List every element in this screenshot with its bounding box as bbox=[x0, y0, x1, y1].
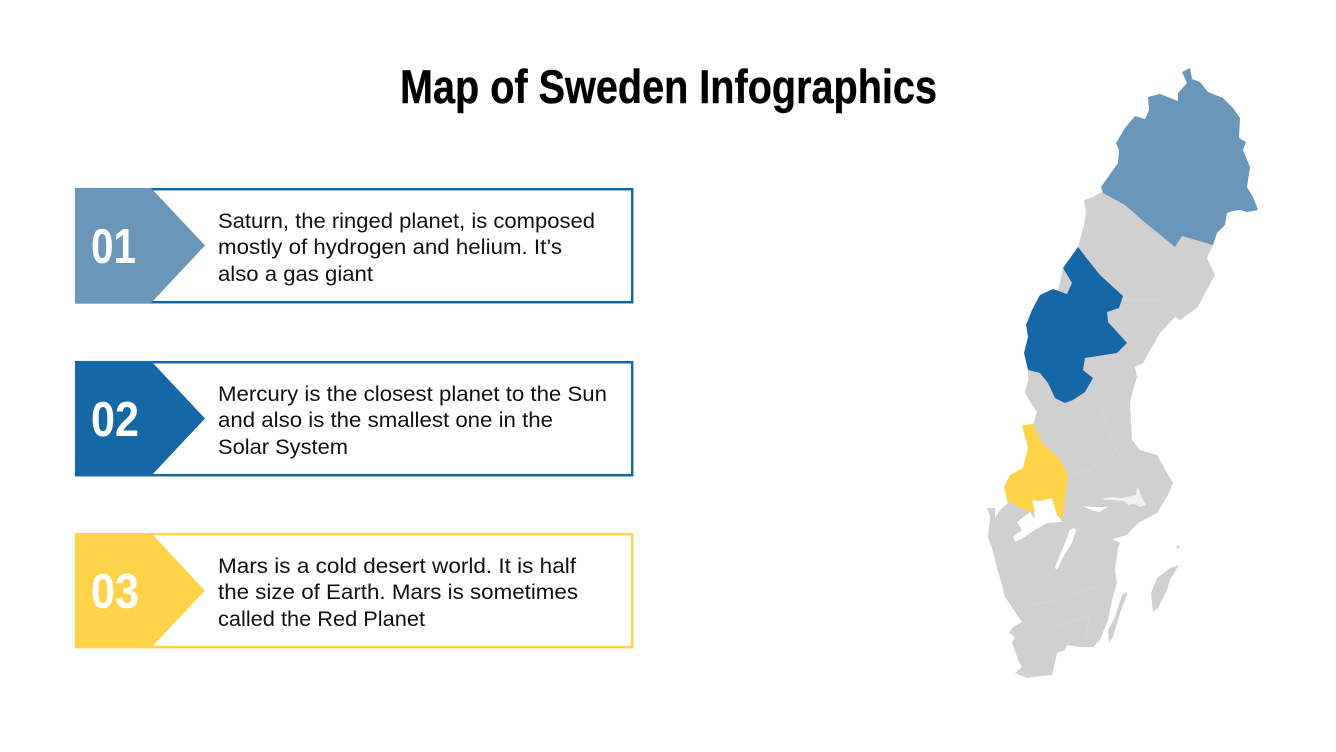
chart: map of Sweden bbox=[987, 68, 1258, 678]
panel: item 01 bbox=[75, 188, 632, 303]
text block 03 bbox=[218, 554, 578, 631]
arrow badge 02 bbox=[75, 361, 205, 476]
text block 03: Mars is a cold desert world. It is half bbox=[218, 554, 576, 578]
text block 01 bbox=[218, 209, 595, 286]
region: Oland bbox=[1108, 592, 1127, 643]
region: Gotland bbox=[1151, 565, 1179, 612]
text block 02: Solar System bbox=[218, 435, 348, 459]
arrow badge 01 bbox=[75, 188, 205, 303]
number 02: 02 bbox=[91, 393, 139, 447]
panel: item 02 bbox=[75, 361, 632, 476]
region: Jamtland (dark blue) bbox=[1024, 247, 1127, 403]
text block 01: also a gas giant bbox=[218, 262, 373, 286]
title: Map of Sweden Infographics bbox=[400, 60, 937, 113]
lake: Malaren bbox=[1103, 487, 1146, 507]
small island bbox=[1176, 546, 1180, 548]
number 03: 03 bbox=[91, 565, 139, 619]
text block 03: called the Red Planet bbox=[218, 607, 425, 631]
county borders bbox=[1020, 300, 1177, 645]
text block 02: Mercury is the closest planet to the Sun bbox=[218, 382, 607, 406]
arrow badge 03 bbox=[75, 533, 205, 648]
lake: Vanern bbox=[1013, 498, 1062, 542]
number 01: 01 bbox=[91, 220, 136, 274]
text block 01: mostly of hydrogen and helium. It’s bbox=[218, 235, 562, 259]
region: rest of Sweden (grey) bbox=[987, 192, 1215, 678]
lake: Vattern bbox=[1055, 528, 1076, 570]
lake: Hjalmaren bbox=[1083, 506, 1108, 512]
text block 02 bbox=[218, 382, 607, 459]
region: Varmland (yellow) bbox=[1004, 424, 1068, 520]
region: Norrbotten (light blue) bbox=[1101, 68, 1258, 247]
text block 03: the size of Earth. Mars is sometimes bbox=[218, 580, 578, 604]
panel: item 03 bbox=[75, 533, 632, 648]
text block 02: and also is the smallest one in the bbox=[218, 408, 553, 432]
text block 01: Saturn, the ringed planet, is composed bbox=[218, 209, 595, 233]
